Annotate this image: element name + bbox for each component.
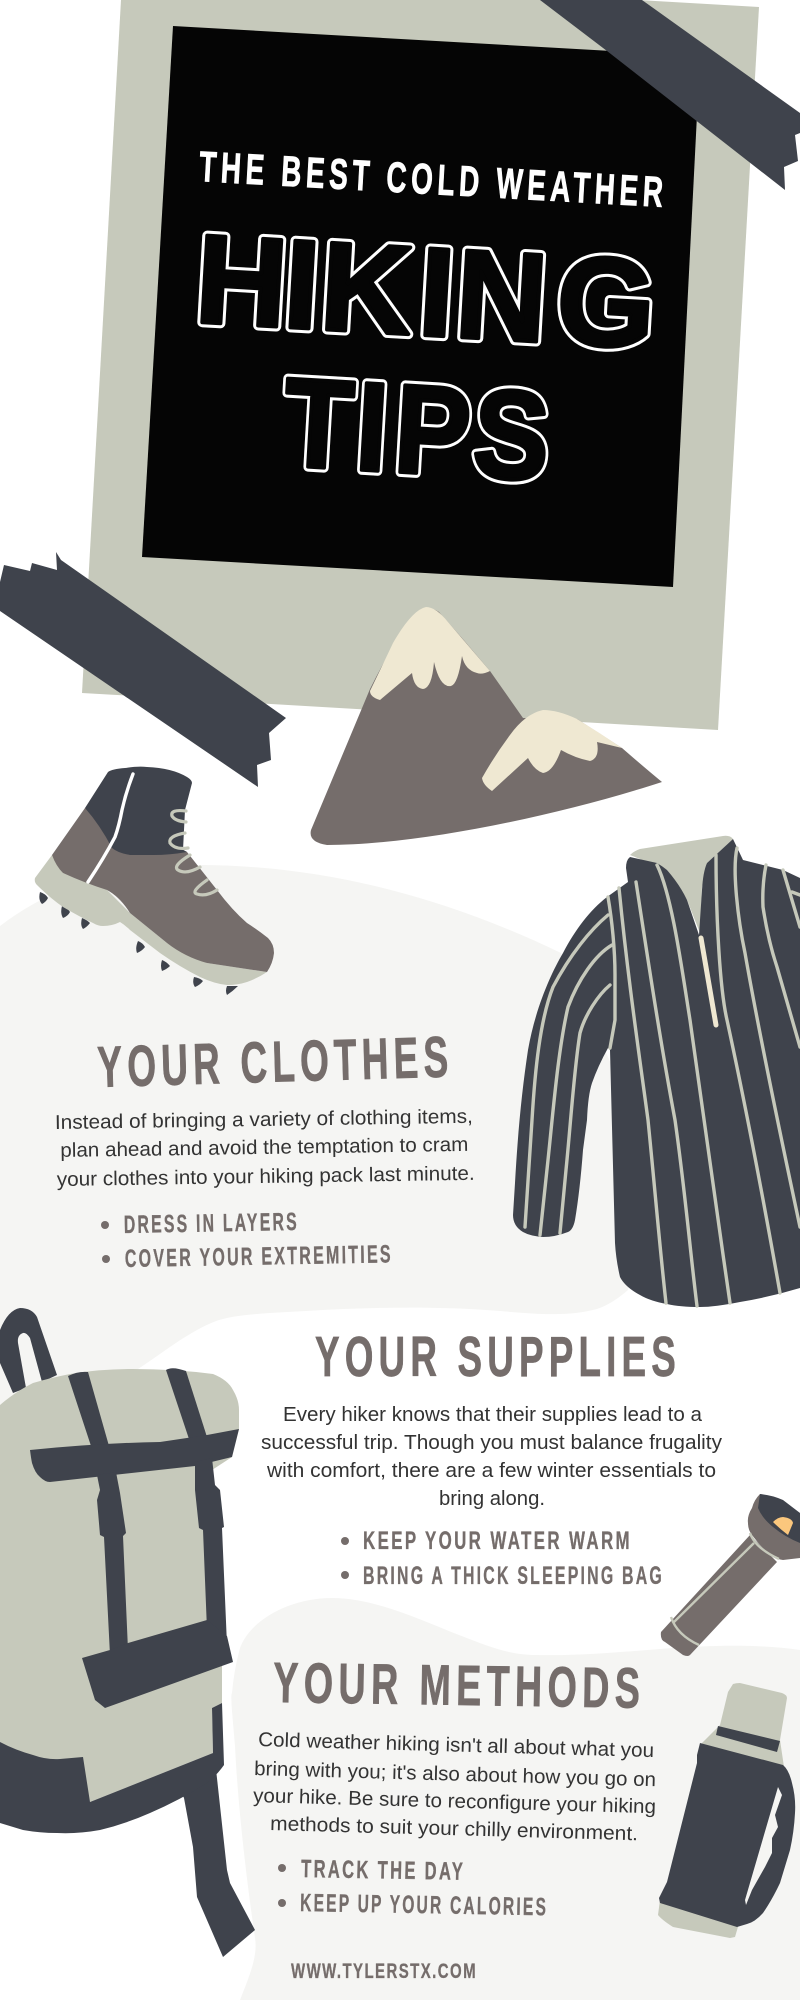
tape: top right (540, 0, 800, 190)
top straps (68, 1372, 109, 1446)
text block: methods body: Cold weather hiking isn't all about what you (258, 1729, 654, 1762)
photo panel: black (142, 26, 700, 587)
laces (170, 811, 217, 895)
tape: left (0, 552, 286, 787)
flap band (30, 1429, 239, 1482)
lower straps (97, 1472, 128, 1655)
pocket band (82, 1620, 233, 1708)
text block: methods body (253, 1729, 656, 1845)
text block: methods body: bring with you; it's also about how you go on (254, 1758, 656, 1791)
sole (35, 855, 267, 985)
text block: methods body: your hike. Be sure to reconfigure your hiking (253, 1785, 656, 1818)
icon: backpack (0, 1308, 255, 1957)
list: methods tips: KEEP UP YOUR CALORIES (300, 1889, 548, 1921)
loop (0, 1308, 57, 1393)
background blob: methods section (231, 1598, 800, 2000)
spikes (39, 892, 238, 995)
list: methods tips (278, 1855, 548, 1921)
text block: clothes body: your clothes into your hiking pack last minute. (57, 1163, 475, 1191)
list: clothes tips: COVER YOUR EXTREMITIES (125, 1240, 393, 1273)
icon: hiking boot (35, 767, 274, 995)
panel: polaroid frame (82, 0, 759, 730)
text block: methods body: methods to suit your chilly environment. (270, 1813, 638, 1845)
text block: supplies body (261, 1404, 722, 1510)
icon: flashlight (661, 1494, 800, 1656)
list: clothes tips (101, 1208, 393, 1273)
icon: mountain (311, 607, 662, 845)
text block: supplies body: successful trip. Though you must balance frugality (261, 1432, 722, 1454)
list: methods tips: TRACK THE DAY (301, 1855, 465, 1886)
list: supplies tips: KEEP YOUR WATER WARM (363, 1527, 632, 1555)
title: tips: TIPS (280, 352, 553, 508)
text block: clothes body: Instead of bringing a variety of clothing items, (55, 1106, 473, 1134)
lower dark panel (0, 1703, 224, 1833)
ankle cuff (85, 767, 192, 855)
title: hiking: HIKING (192, 208, 659, 375)
text block: clothes body (55, 1106, 475, 1191)
main body (0, 1369, 239, 1802)
text block: clothes body: plan ahead and avoid the temptation to cram (60, 1134, 468, 1162)
text block: supplies body: Every hiker knows that their supplies lead to a (283, 1404, 703, 1426)
icon: striped jacket (513, 836, 800, 1307)
title: tips: TIPS (280, 352, 553, 508)
title: hiking: HIKING (192, 208, 659, 375)
text block: supplies body: with comfort, there are a few winter essentials to (266, 1460, 716, 1482)
heading: your clothes: YOUR CLOTHES (96, 1024, 454, 1100)
background blob: clothes section (0, 865, 650, 1420)
footer: website: WWW.TYLERSTX.COM (291, 1960, 477, 1983)
list: clothes tips: DRESS IN LAYERS (124, 1208, 299, 1239)
hanging strap (175, 1760, 255, 1957)
leather (52, 808, 274, 972)
text block: supplies body: bring along. (439, 1488, 545, 1510)
icon: thermos (658, 1683, 795, 1938)
list: supplies tips (341, 1527, 664, 1590)
